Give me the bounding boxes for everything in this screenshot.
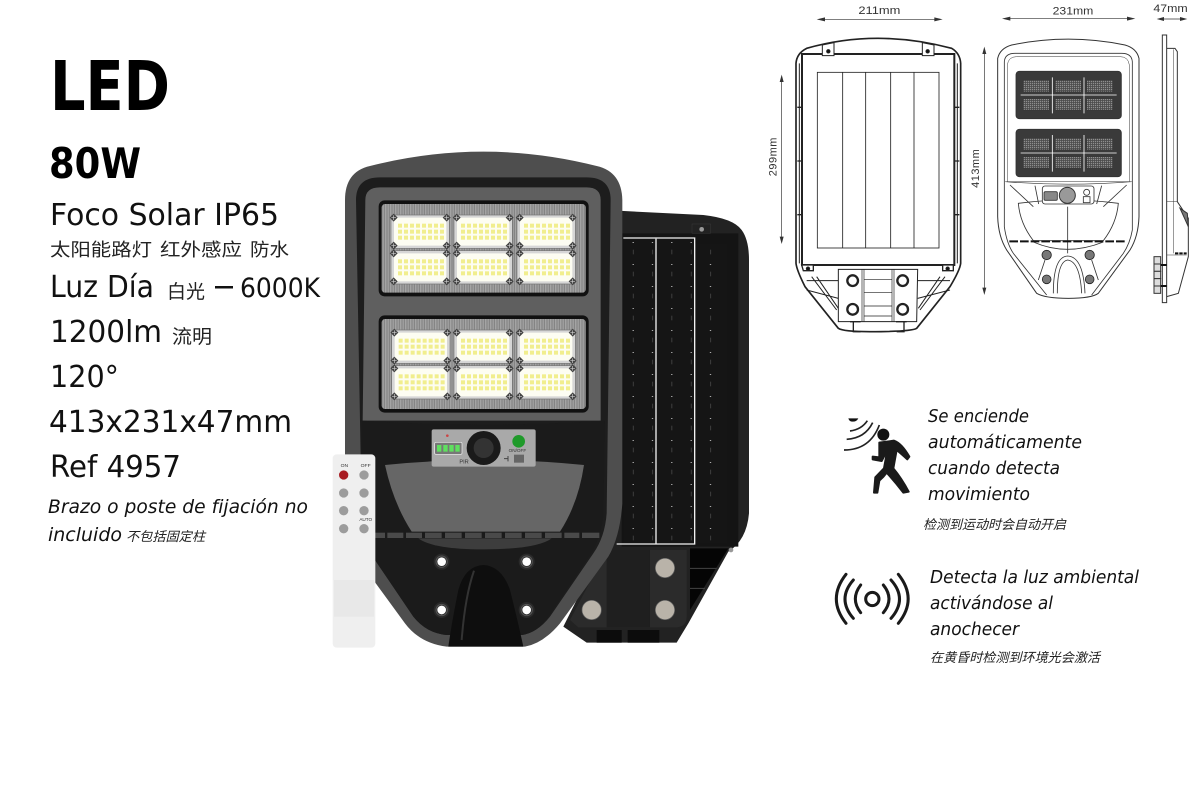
- front view LED panels: [1016, 71, 1121, 177]
- remote control: [333, 454, 375, 648]
- front of lamp housing: [345, 152, 622, 647]
- spec: beam angle: 120°: [50, 360, 119, 395]
- dimension labels and arrows: 47mm: [1153, 3, 1188, 15]
- spec: Chinese product description: 红外感应: [160, 240, 242, 260]
- spec: dimensions: 413x231x47mm: [49, 405, 292, 440]
- icon: concentric signal waves: [836, 574, 908, 623]
- feature: motion sensor: [844, 406, 1082, 532]
- remote control: AUTO: [359, 517, 373, 522]
- note: mounting arm not included: [48, 496, 308, 546]
- feature: ambient light sensor: [836, 567, 1139, 665]
- note: mounting arm not included: incluido: [48, 524, 122, 546]
- dimension labels and arrows: 231mm: [1053, 6, 1093, 18]
- LED panel: lower: [379, 315, 589, 413]
- dark lower housing: [362, 421, 605, 635]
- motion sensor description: automáticamente: [928, 432, 1082, 453]
- ambient light description: Detecta la luz ambiental: [930, 567, 1139, 588]
- bolts: [434, 554, 535, 618]
- dimension labels and arrows: 299mm: [768, 137, 780, 176]
- icon: walking person with sensor waves: [844, 418, 909, 493]
- spec: reference: Ref 4957: [50, 450, 181, 485]
- dimension labels and arrows: 413mm: [970, 149, 982, 188]
- spec: luminous flux: 流明: [172, 326, 212, 348]
- control panel: battery, PIR sensor, on/off: ON/OFF: [509, 448, 526, 453]
- spec: colour temperature: 6000K: [240, 273, 321, 304]
- grey reflector: [385, 460, 584, 532]
- ambient light description: activándose al: [930, 593, 1053, 614]
- spec: colour temperature: Luz Día: [50, 270, 154, 305]
- ambient light Chinese caption: 在黄昏时检测到环境光会激活: [930, 650, 1102, 665]
- ambient light description: [930, 567, 1139, 640]
- technical drawing: dimensions: [768, 3, 1188, 332]
- title: LED: LED: [50, 47, 170, 127]
- spec: colour temperature: 白光: [167, 281, 205, 303]
- dimension labels and arrows: [768, 3, 1188, 295]
- rear view with solar panel: [796, 38, 961, 332]
- note: mounting arm not included: 不包括固定柱: [126, 529, 207, 544]
- spec: luminous flux: 1200lm: [50, 315, 162, 350]
- motion sensor Chinese caption: 检测到运动时会自动开启: [923, 517, 1067, 532]
- spec: Chinese product description: 防水: [250, 240, 289, 260]
- remote control: OFF: [361, 463, 371, 469]
- motion sensor description: Se enciende: [928, 406, 1029, 427]
- LED panel: upper: [379, 200, 589, 296]
- text block: specifications: [49, 198, 321, 485]
- product photo: solar street light: [333, 152, 749, 648]
- motion sensor description: [928, 406, 1082, 505]
- ambient light description: anochecer: [930, 619, 1021, 640]
- remote control: ON: [341, 463, 349, 469]
- control panel: battery, PIR sensor, on/off: PIR: [459, 460, 469, 466]
- spec: Chinese product description: 太阳能路灯: [50, 240, 152, 260]
- front view: [998, 39, 1139, 298]
- heading: wattage: 80W: [49, 139, 141, 188]
- dimension labels and arrows: 211mm: [858, 5, 900, 17]
- spec: Chinese product description: [50, 240, 289, 260]
- control panel: battery, PIR sensor, on/off: [432, 429, 536, 467]
- mounting bracket: [448, 565, 523, 647]
- side view: [1154, 35, 1188, 303]
- motion sensor description: movimiento: [928, 484, 1030, 505]
- note: mounting arm not included: Brazo o poste de fijación no: [48, 496, 308, 518]
- motion sensor description: cuando detecta: [928, 458, 1060, 479]
- spec: product type: Foco Solar IP65: [50, 198, 279, 233]
- vent strip: [375, 533, 599, 538]
- back of lamp with solar panel: [563, 211, 749, 643]
- spec: colour temperature: [50, 270, 321, 305]
